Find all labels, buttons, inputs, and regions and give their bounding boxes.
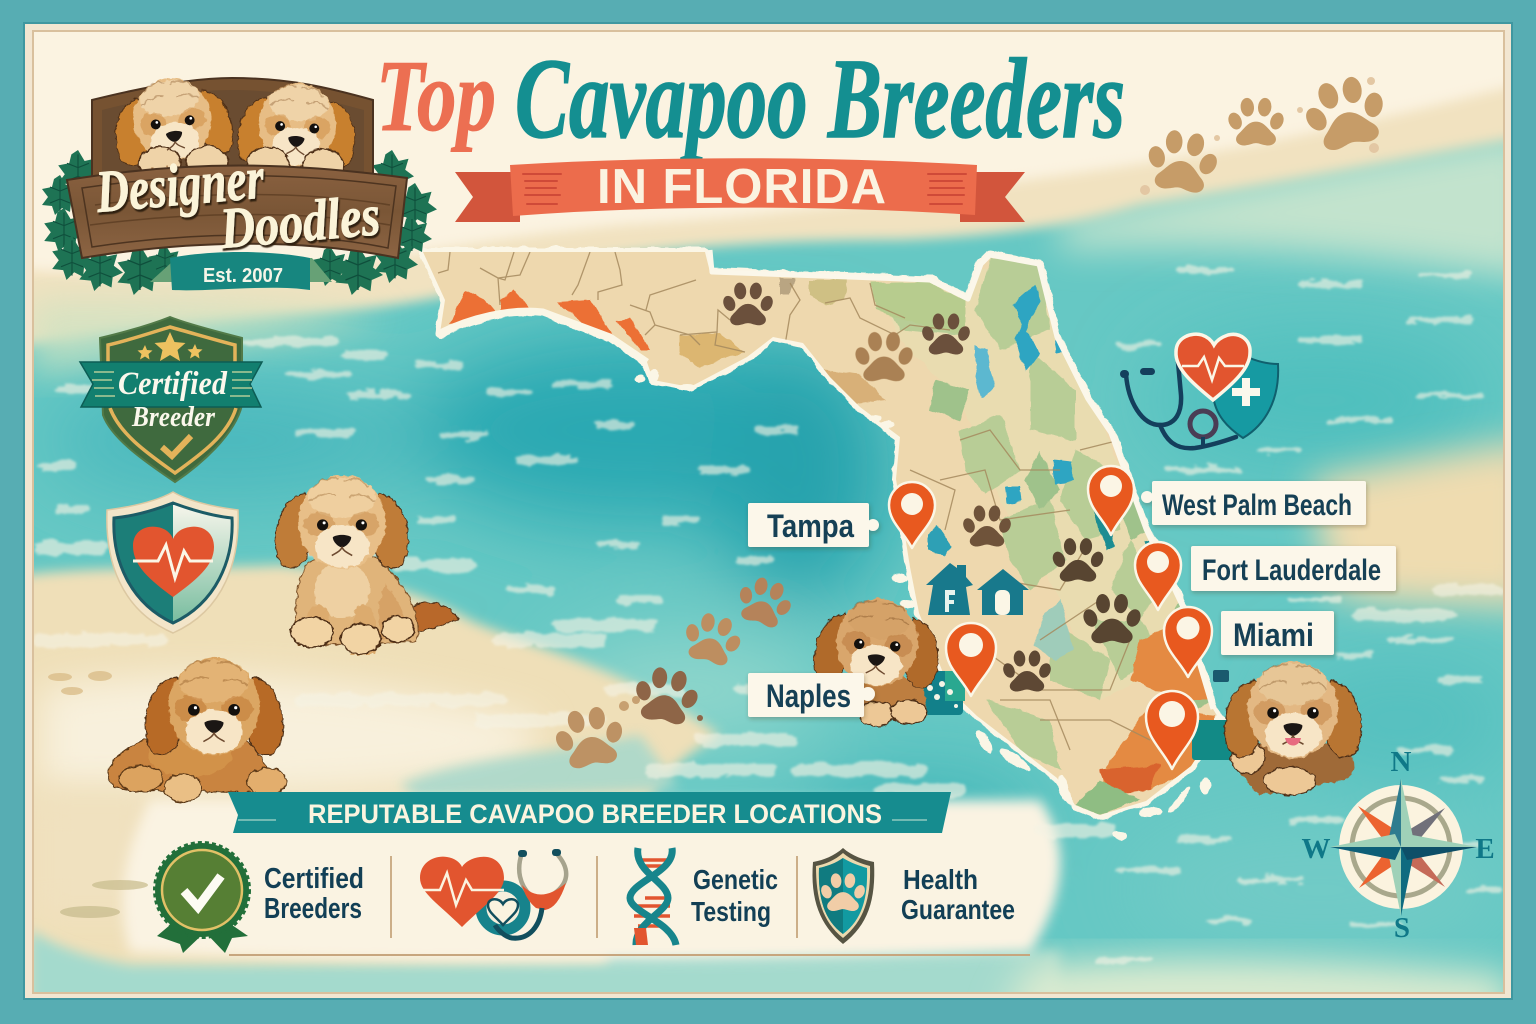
wave streaks: [40, 270, 1500, 960]
bottom panel paper: [123, 800, 1060, 962]
icon: teal map blocks: [921, 670, 1238, 760]
icon: heart and stethoscope: [420, 849, 566, 938]
title: [376, 35, 1125, 162]
logo: Designer Doodles: [42, 71, 437, 295]
text: health guarantee: Guarantee: [901, 894, 1015, 925]
text: health guarantee: [901, 864, 1015, 925]
title word: Top: Top: [376, 40, 496, 153]
ribbon text: IN FLORIDA: [597, 160, 886, 214]
tan paw on land: [853, 331, 915, 381]
sand footprints: [48, 671, 148, 918]
text: health guarantee: Health: [903, 864, 978, 895]
established date: Est. 2007: [203, 265, 283, 287]
icon: certified medal: [155, 843, 249, 953]
icon: paw shield: [812, 848, 874, 944]
label: Fort Lauderdale: [1191, 546, 1396, 591]
label: Naples: Naples: [766, 678, 851, 714]
map: Florida: [400, 240, 1250, 840]
lakes: [1004, 285, 1075, 503]
label: Miami: Miami: [1233, 617, 1314, 653]
map pins: [889, 466, 1212, 769]
badge stars: [138, 332, 202, 361]
icon: DNA helix: [630, 848, 676, 945]
text: certified breeders: Breeders: [264, 893, 362, 925]
city labels: [748, 481, 1396, 717]
puppy: near Miami: [1225, 661, 1361, 795]
text: genetic testing: [691, 864, 778, 927]
logo wordmark: Doodles: [217, 182, 383, 261]
feature row: [155, 843, 1030, 955]
left beach sand: [0, 565, 720, 1024]
label: Miami: [1221, 611, 1334, 655]
badge: health heart shield: [107, 492, 238, 633]
left sand panel: [30, 790, 160, 920]
label: West Palm Beach: [1141, 481, 1366, 525]
banner: reputable cavapoo breeder locations: REPUTABLE CAVAPOO BREEDER LOCATIONS: [308, 799, 882, 829]
label: West Palm Beach: West Palm Beach: [1162, 489, 1352, 522]
label: Fort Lauderdale: Fort Lauderdale: [1202, 554, 1381, 587]
barrier islands: [635, 369, 1247, 840]
puppy: sitting on beach: [276, 475, 458, 655]
back board: [92, 78, 373, 180]
compass letters: S: [1394, 912, 1410, 944]
white coastline: [423, 252, 1222, 815]
pin: south Florida: [1146, 691, 1198, 769]
text: genetic testing: Genetic: [693, 864, 778, 895]
ribbon: In Florida: [455, 158, 1025, 222]
title words: Cavapoo Breeders: Cavapoo Breeders: [515, 35, 1125, 162]
text: genetic testing: Testing: [691, 896, 771, 927]
badge text: Certified: [118, 366, 227, 402]
heart: [133, 527, 214, 597]
label: Tampa: Tampa: [767, 508, 854, 544]
pin: West Palm Beach: [1088, 466, 1134, 535]
front plank: [67, 166, 407, 258]
banner: reputable cavapoo breeder locations: [228, 792, 951, 833]
pin: Naples: [946, 623, 996, 696]
pale shallows, top right: [1060, 130, 1536, 280]
badge banner: [80, 362, 262, 407]
compass rose: [1302, 746, 1495, 944]
compass letters: N: [1391, 746, 1412, 778]
pin: Fort Lauderdale: [1135, 542, 1181, 610]
pin: Miami: [1164, 607, 1212, 677]
land fill and regions: [423, 252, 1217, 815]
logo ribbon: [150, 258, 332, 282]
logo wordmark: [93, 145, 383, 261]
compass short points: [1358, 806, 1400, 846]
sky paw trail, top right: [1140, 69, 1395, 196]
county lines: [438, 252, 1150, 750]
coast outline: [710, 250, 1213, 709]
puppy: lying on beach: [108, 658, 287, 802]
compass letters: [1302, 746, 1495, 944]
badge check: [162, 436, 191, 456]
icon: homes on map: [926, 563, 1029, 615]
compass letters: E: [1475, 833, 1495, 865]
compass long points: [1388, 779, 1401, 847]
right beach sand: [1310, 440, 1536, 610]
top cream and sand: [34, 79, 1503, 352]
pin: Tampa: [889, 482, 935, 548]
text: certified breeders: Certified: [264, 863, 364, 895]
puppy: near Naples: [813, 594, 942, 726]
badge: certified breeder: [80, 317, 262, 482]
dark paws on land: [721, 282, 1143, 692]
text: certified breeders: [264, 863, 364, 925]
compass letters: W: [1302, 833, 1330, 865]
icon: stethoscope with heart and shield: [1120, 334, 1278, 448]
bottom fade: [34, 927, 1064, 992]
badge: certified breeder: Breeder: [131, 402, 216, 433]
label: Tampa: [748, 503, 879, 547]
logo leaves: [42, 150, 437, 295]
logo puppies: [109, 71, 359, 181]
logo wordmark: Designer: [93, 145, 267, 225]
map paw prints: [721, 282, 1143, 692]
sea paw trail: [549, 571, 799, 772]
label: Naples: [748, 673, 875, 717]
